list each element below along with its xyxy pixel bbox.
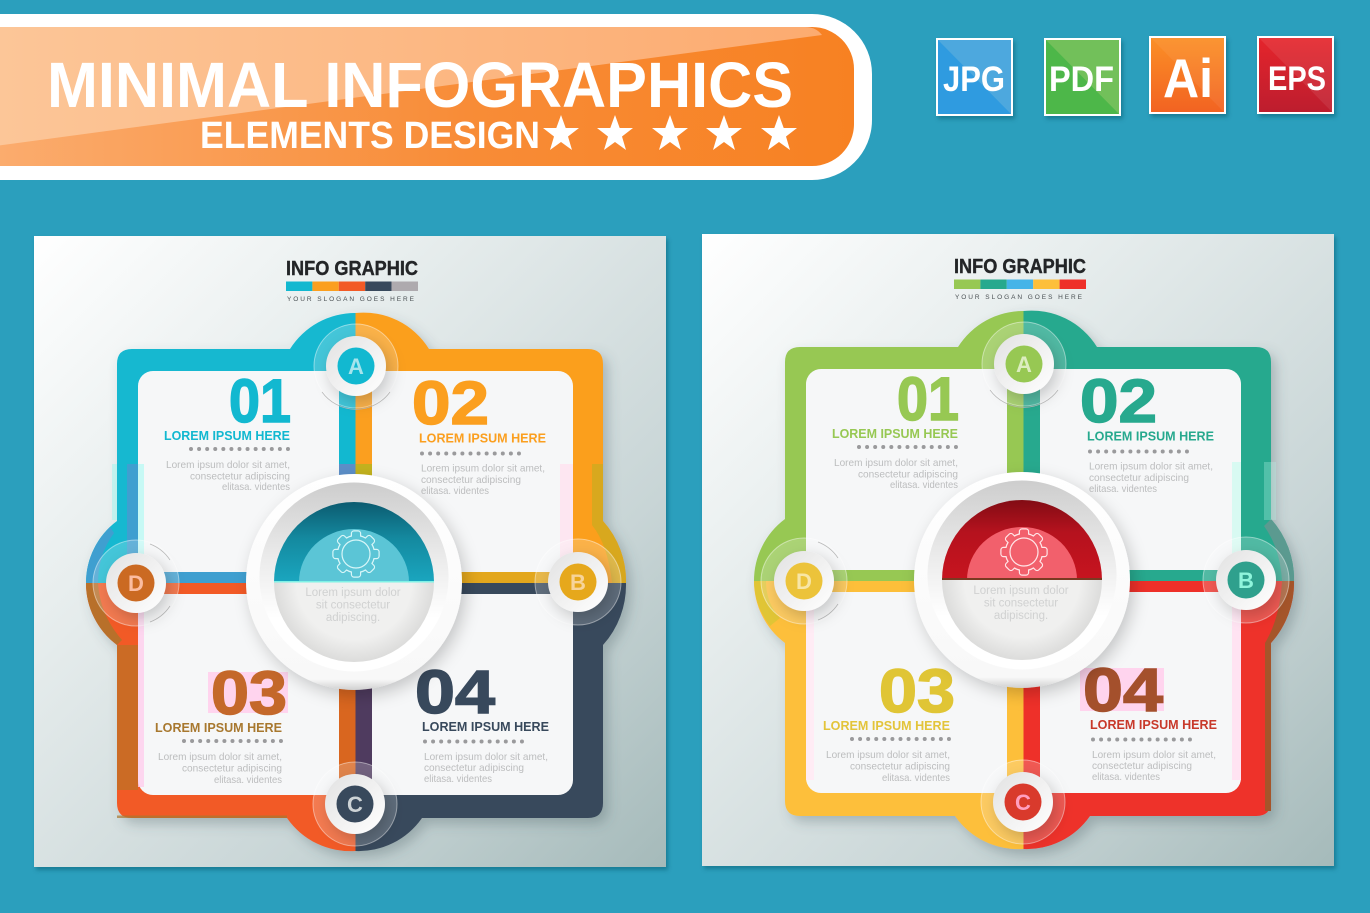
badge C <box>313 762 397 846</box>
card 02: 02 <box>1080 367 1157 435</box>
hub text: sit consectetur <box>316 600 390 612</box>
badge A <box>314 324 398 409</box>
panel: left infographic <box>34 236 666 867</box>
frame: quadrant 4 <box>1024 581 1294 849</box>
card tint halos <box>806 462 1241 780</box>
card 04: 04 <box>415 658 495 726</box>
hub text <box>305 587 401 624</box>
icon: gear <box>1002 530 1046 574</box>
card 01: Lorem ipsum dolor sit amet, <box>834 457 958 469</box>
card 03 <box>155 659 288 786</box>
card 04: consectetur adipiscing <box>424 762 524 774</box>
banner orange fill <box>0 27 854 166</box>
heading: INFO GRAPHIC <box>286 258 418 280</box>
card 04 <box>1080 656 1217 783</box>
card 02: LOREM IPSUM HERE <box>1087 428 1214 444</box>
badge B: B <box>1238 568 1254 593</box>
card 04: Lorem ipsum dolor sit amet, <box>424 751 548 763</box>
hub text: adipiscing. <box>326 612 380 624</box>
card 01: LOREM IPSUM HERE <box>832 426 958 441</box>
frame: quadrant 3 <box>754 581 1024 849</box>
hub text <box>973 585 1069 622</box>
colour strip <box>954 280 1086 289</box>
colour shift patches <box>754 462 1294 811</box>
badge C: C <box>347 792 363 817</box>
frame: quadrant 2 <box>356 313 626 583</box>
card 02: elitasa. videntes <box>421 485 489 497</box>
cross bars <box>138 371 573 795</box>
hub text: adipiscing. <box>994 610 1048 622</box>
card 02: elitasa. videntes <box>1089 483 1157 495</box>
badge D: D <box>128 571 144 596</box>
card 01: LOREM IPSUM HERE <box>164 428 290 443</box>
badge A: A <box>348 354 364 379</box>
badge B <box>535 539 621 625</box>
card 01: elitasa. videntes <box>222 481 290 493</box>
icon: JPG <box>936 38 1013 116</box>
card 02: Lorem ipsum dolor sit amet, <box>1089 460 1213 472</box>
card 02 <box>412 369 546 497</box>
card 03: LOREM IPSUM HERE <box>155 720 282 735</box>
card 04: Lorem ipsum dolor sit amet, <box>1092 749 1216 761</box>
card 01 <box>832 365 959 491</box>
rating stars <box>543 115 797 150</box>
card 04 <box>415 658 549 785</box>
card 03: Lorem ipsum dolor sit amet, <box>158 751 282 763</box>
icon: Ai: Ai <box>1163 47 1213 109</box>
card 01: consectetur adipiscing <box>858 468 958 480</box>
card 01 <box>164 367 291 493</box>
panel: right infographic <box>702 234 1334 866</box>
card 01: elitasa. videntes <box>890 479 958 491</box>
heading: INFO GRAPHIC <box>954 256 1086 278</box>
hub text: Lorem ipsum dolor <box>305 587 401 599</box>
banner white outline <box>0 14 872 180</box>
badge A <box>982 322 1066 407</box>
hub text: sit consectetur <box>984 598 1058 610</box>
card 03 <box>823 657 955 784</box>
badge B <box>1203 537 1289 623</box>
icon: PDF: PDF <box>1049 60 1114 99</box>
frame: quadrant 4 <box>356 583 626 851</box>
badge B: B <box>570 570 586 595</box>
card 01: Lorem ipsum dolor sit amet, <box>166 459 290 471</box>
frame: quadrant 2 <box>1024 311 1294 581</box>
card 01: consectetur adipiscing <box>190 470 290 482</box>
card 04: 04 <box>1083 656 1163 724</box>
card 03: consectetur adipiscing <box>182 762 282 774</box>
badge D: D <box>796 569 812 594</box>
card 03: 03 <box>211 659 287 727</box>
cross bars <box>806 369 1241 793</box>
card 03: consectetur adipiscing <box>850 760 950 772</box>
card 02: 02 <box>412 369 489 437</box>
card 04: LOREM IPSUM HERE <box>1090 717 1217 732</box>
quadrant frame <box>86 313 626 851</box>
card 02: LOREM IPSUM HERE <box>419 430 546 446</box>
colour shift patches <box>86 464 626 818</box>
card 02: consectetur adipiscing <box>421 474 521 486</box>
card 04: elitasa. videntes <box>1092 771 1160 783</box>
frame: quadrant 3 <box>86 583 355 851</box>
card 02: consectetur adipiscing <box>1089 472 1189 484</box>
main title: MINIMAL INFOGRAPHICS <box>47 49 793 121</box>
white card <box>806 369 1241 793</box>
card 04: consectetur adipiscing <box>1092 760 1192 772</box>
icon: gear <box>334 532 378 576</box>
panel background <box>34 236 666 867</box>
card 02: Lorem ipsum dolor sit amet, <box>421 462 545 474</box>
panel background <box>702 234 1334 866</box>
hub text: Lorem ipsum dolor <box>973 585 1069 597</box>
slogan: YOUR SLOGAN GOES HERE <box>955 294 1083 301</box>
card 03: elitasa. videntes <box>882 772 950 784</box>
card tint halos <box>138 464 573 787</box>
card 03: 03 <box>879 657 955 725</box>
card 03: elitasa. videntes <box>214 774 282 786</box>
badge D <box>93 540 179 626</box>
subtitle: ELEMENTS DESIGN <box>200 115 540 157</box>
centre hub <box>914 472 1130 688</box>
badge C: C <box>1015 790 1031 815</box>
badge C <box>981 760 1065 844</box>
frame: quadrant 1 <box>754 311 1024 581</box>
card 04: elitasa. videntes <box>424 773 492 785</box>
card 01: 01 <box>229 367 291 435</box>
icon: JPG: JPG <box>943 60 1005 99</box>
frame: quadrant 1 <box>86 313 356 583</box>
card 04: LOREM IPSUM HERE <box>422 719 549 734</box>
slogan: YOUR SLOGAN GOES HERE <box>287 296 415 303</box>
card 03: LOREM IPSUM HERE <box>823 718 950 733</box>
colour strip <box>286 282 418 291</box>
white card <box>138 371 573 795</box>
icon: EPS <box>1257 36 1334 114</box>
badge A: A <box>1016 352 1032 377</box>
icon: Ai <box>1149 36 1226 114</box>
banner gloss <box>0 27 822 146</box>
card 03: Lorem ipsum dolor sit amet, <box>826 749 950 761</box>
centre hub <box>246 474 462 690</box>
icon: EPS: EPS <box>1268 60 1326 98</box>
quadrant frame <box>754 311 1294 849</box>
card 02 <box>1080 367 1214 495</box>
title banner <box>0 14 872 180</box>
icon: PDF <box>1044 38 1121 116</box>
card 01: 01 <box>897 365 959 433</box>
badge D <box>761 538 847 624</box>
